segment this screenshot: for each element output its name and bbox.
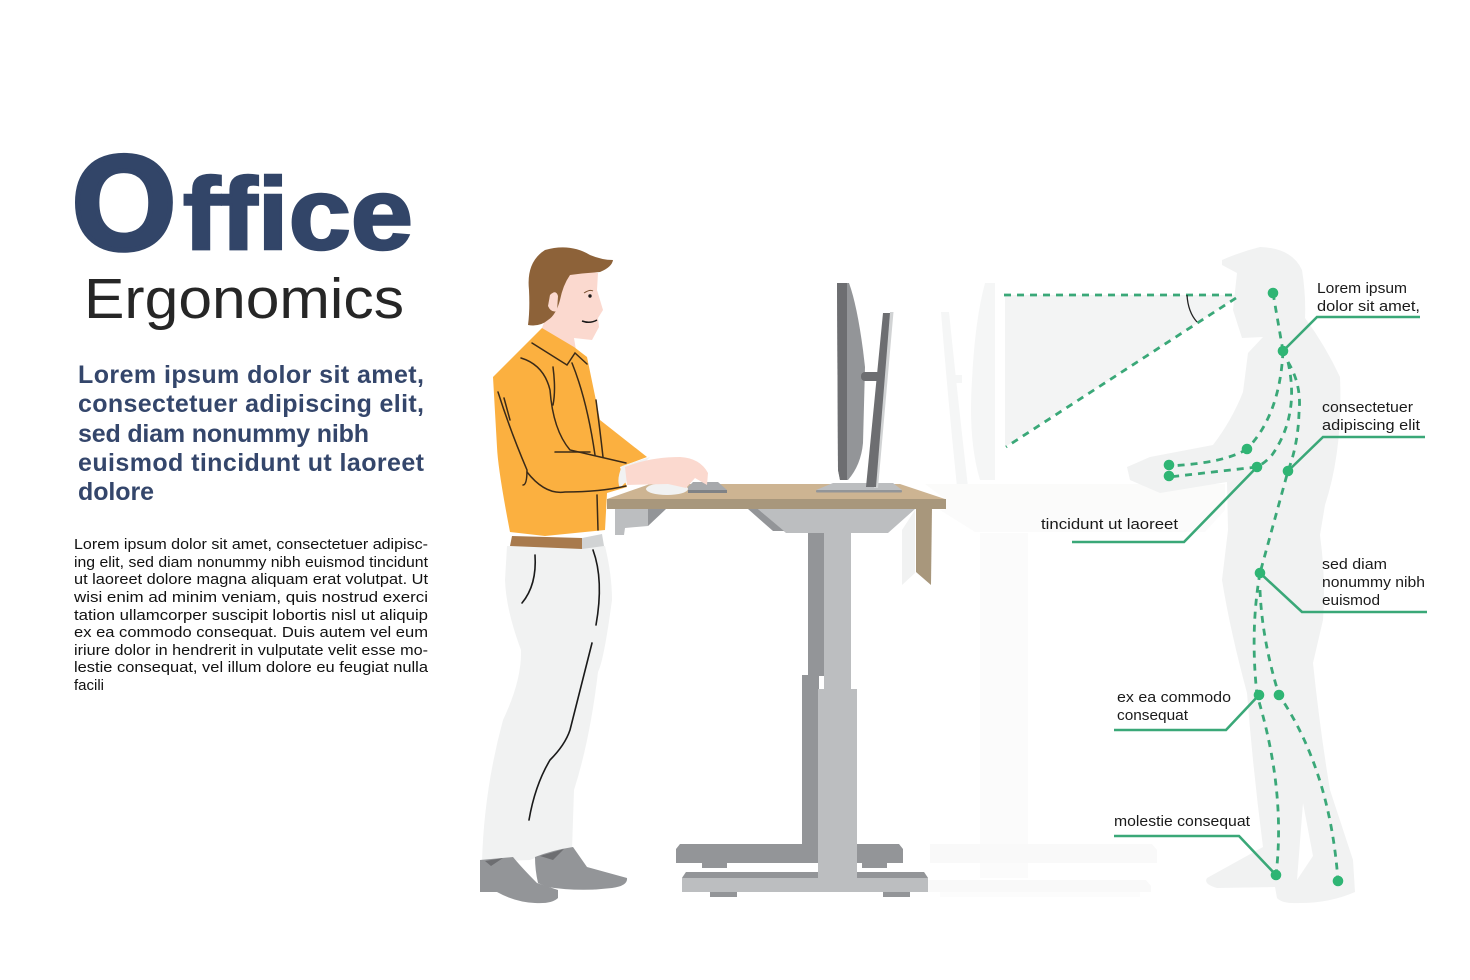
sight lines — [1004, 295, 1238, 447]
heading text block: Lorem ipsum dolor sit amet, — [78, 361, 424, 389]
callout label: foot: molestie consequat — [1114, 813, 1251, 830]
angle arc — [1187, 295, 1197, 322]
title: Office: ffice — [183, 157, 413, 271]
heading text block: dolore — [78, 478, 154, 506]
subtitle: Ergonomics: Ergonomics — [84, 267, 404, 330]
trousers — [482, 546, 612, 862]
ghost man leg gap — [1297, 803, 1313, 880]
title: Office — [72, 129, 413, 278]
standing man — [480, 247, 708, 903]
callout label: hips — [1322, 556, 1425, 609]
callout label: hips: euismod — [1322, 592, 1380, 609]
callout label: head: dolor sit amet, — [1317, 298, 1420, 315]
body text block: lestie consequat, vel illum dolore eu feugiat nulla — [74, 660, 429, 676]
callout label: hips: sed diam — [1322, 556, 1387, 573]
body text block: iriure dolor in hendrerit in vulputate velit esse mo- — [74, 643, 428, 659]
callout label: back: consectetuer — [1322, 399, 1413, 416]
body text block: tation ullamcorper suscipit lobortis nisl ut aliquip — [74, 608, 428, 624]
callout label: knee: ex ea commodo — [1117, 689, 1231, 706]
heading text block: consectetuer adipiscing elit, — [78, 390, 424, 418]
callout label: head: Lorem ipsum — [1317, 280, 1407, 297]
keyboard — [688, 482, 727, 493]
neck and face — [542, 268, 603, 352]
body text block: ut laoreet dolore magna aliquam erat volutpat. Ut — [74, 572, 428, 588]
monitor panel — [866, 312, 894, 488]
lower column — [818, 689, 857, 881]
joint markers — [1164, 288, 1343, 886]
ear — [548, 292, 558, 311]
callout label: head — [1317, 280, 1420, 315]
shoes — [480, 847, 627, 903]
callout label: back: adipiscing elit — [1322, 417, 1421, 434]
mouse — [646, 483, 688, 495]
ghost man silhouette — [1127, 247, 1355, 903]
desk top — [607, 484, 946, 509]
body text block: wisi enim ad minim veniam, quis nostrud exerci — [73, 590, 428, 606]
monitor — [816, 283, 902, 492]
neck line — [1273, 293, 1283, 351]
desk leg column — [802, 533, 851, 845]
callout label: back — [1322, 399, 1421, 434]
leg lines — [1254, 573, 1338, 881]
belt — [510, 534, 604, 549]
body text block: facili — [74, 678, 104, 694]
callout label: hips: nonummy nibh — [1322, 574, 1425, 591]
arm lines — [1169, 351, 1292, 477]
desk support head — [748, 509, 915, 533]
upper foot — [676, 844, 903, 868]
callout label: knee — [1117, 689, 1231, 724]
trouser creases — [522, 550, 599, 820]
body text block: Lorem ipsum dolor sit amet, consectetuer adipisc- — [74, 537, 428, 553]
heading text block: sed diam nonummy nibh — [78, 420, 369, 448]
spine line — [1260, 362, 1300, 573]
heading text block — [78, 361, 425, 506]
hair — [528, 247, 613, 325]
monitor screen — [837, 283, 865, 480]
ghost desk and monitor — [922, 283, 1225, 897]
callout label: knee: consequat — [1117, 707, 1189, 724]
shirt — [493, 328, 647, 536]
hand and cuff — [618, 457, 708, 488]
eye and mouth — [582, 290, 597, 322]
posture skeleton — [1004, 293, 1338, 881]
body text block: ex ea commodo consequat. Duis autem vel eum — [74, 625, 428, 641]
callout label: elbow: tincidunt ut laoreet — [1041, 516, 1179, 533]
shirt creases — [498, 343, 626, 530]
lower foot — [682, 872, 928, 897]
monitor mount arm — [861, 372, 881, 381]
callout lines — [1072, 317, 1427, 875]
body text block: ing elit, sed diam nonummy nibh euismod tincidunt — [74, 555, 428, 571]
body text block — [73, 537, 429, 694]
title: Office: O — [72, 129, 176, 278]
viewing angle cone — [1005, 295, 1236, 447]
hanging side panel — [902, 507, 932, 585]
standing desk — [607, 484, 946, 897]
monitor stand base — [816, 483, 902, 492]
heading text block: euismod tincidunt ut laoreet — [78, 449, 425, 477]
front bracket — [615, 509, 666, 535]
